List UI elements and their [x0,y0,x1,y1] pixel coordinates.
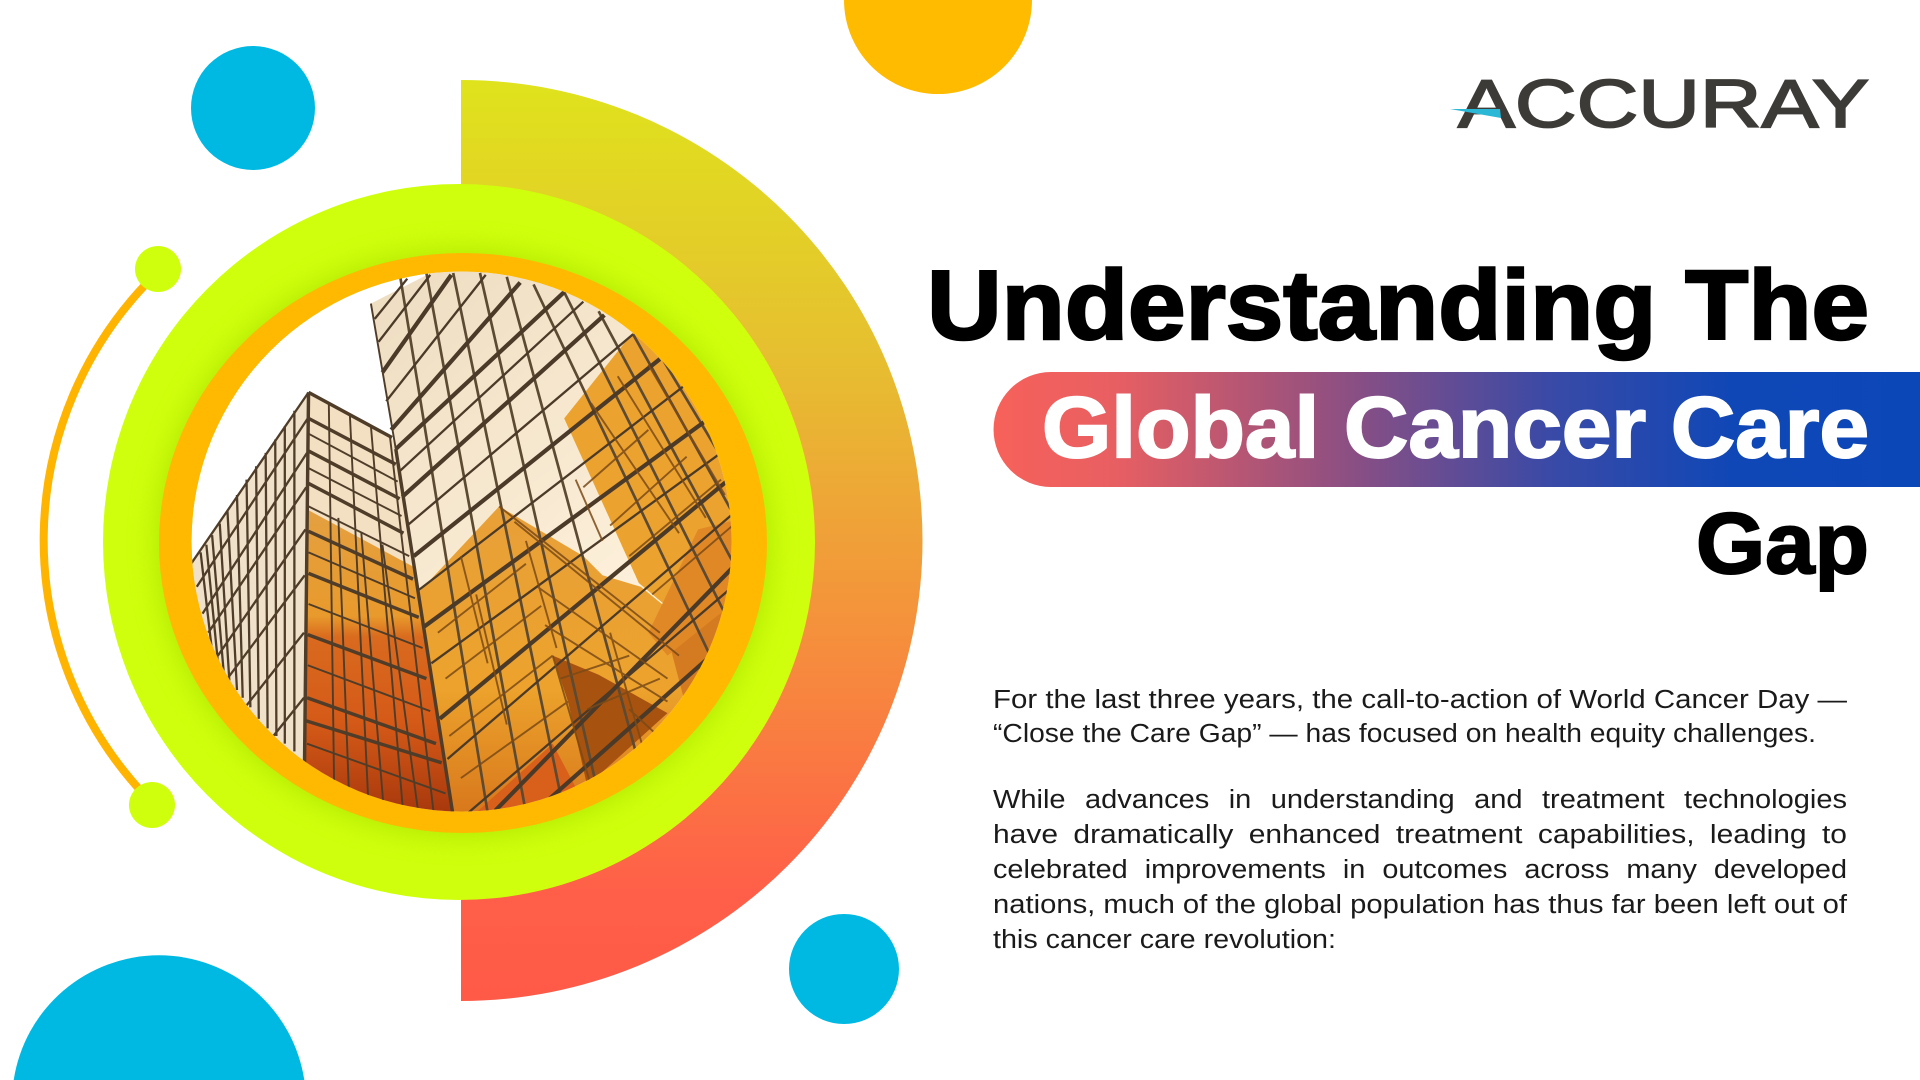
side arc with end dots [44,246,181,828]
logo: Accuray [1450,66,1869,142]
gradient half disc [461,80,923,1001]
orange ring [159,253,767,833]
bottom dot [129,782,175,828]
arc [44,284,146,790]
decorative circle: top blue [191,46,315,170]
paragraph 2: nations, much of the global population has thus far been left out of [993,891,1848,919]
reflection lines [438,365,733,786]
tower columns [400,273,744,813]
title line 3: Gap [1696,496,1869,592]
paragraph 2: While advances in understanding and treatment technologies [993,786,1847,814]
paragraph 2: have dramatically enhanced treatment capabilities, leading to [993,821,1847,849]
lime ring [103,184,815,900]
left building lines [191,304,453,816]
tower face [371,261,744,816]
photo: glass skyscrapers [170,261,744,816]
decorative circle: bottom left blue [14,955,304,1080]
paragraph 2: this cancer care revolution: [993,926,1336,954]
ring shadow [155,249,771,837]
decorative circle: lower right blue [789,914,899,1024]
title [927,250,1920,592]
left building left face [192,397,307,762]
left building right face [304,392,453,816]
paragraph 1: “Close the Care Gap” — has focused on health equity challenges. [993,720,1816,748]
logo swoosh [1450,109,1501,118]
top dot [135,246,181,292]
gradient banner [994,372,1920,487]
decorative circle: top yellow [844,0,1032,94]
title line 1: Understanding The [927,250,1869,360]
logo wordmark: ACCURAY [1458,66,1869,142]
paragraph 1: For the last three years, the call-to-action of World Cancer Day — [993,686,1848,714]
paragraph 1 [993,686,1848,748]
tower floors [375,275,733,816]
paragraph 2 [993,786,1848,954]
title line 2: Global Cancer Care [1042,380,1869,476]
paragraph 2: celebrated improvements in outcomes across many developed [993,856,1847,884]
